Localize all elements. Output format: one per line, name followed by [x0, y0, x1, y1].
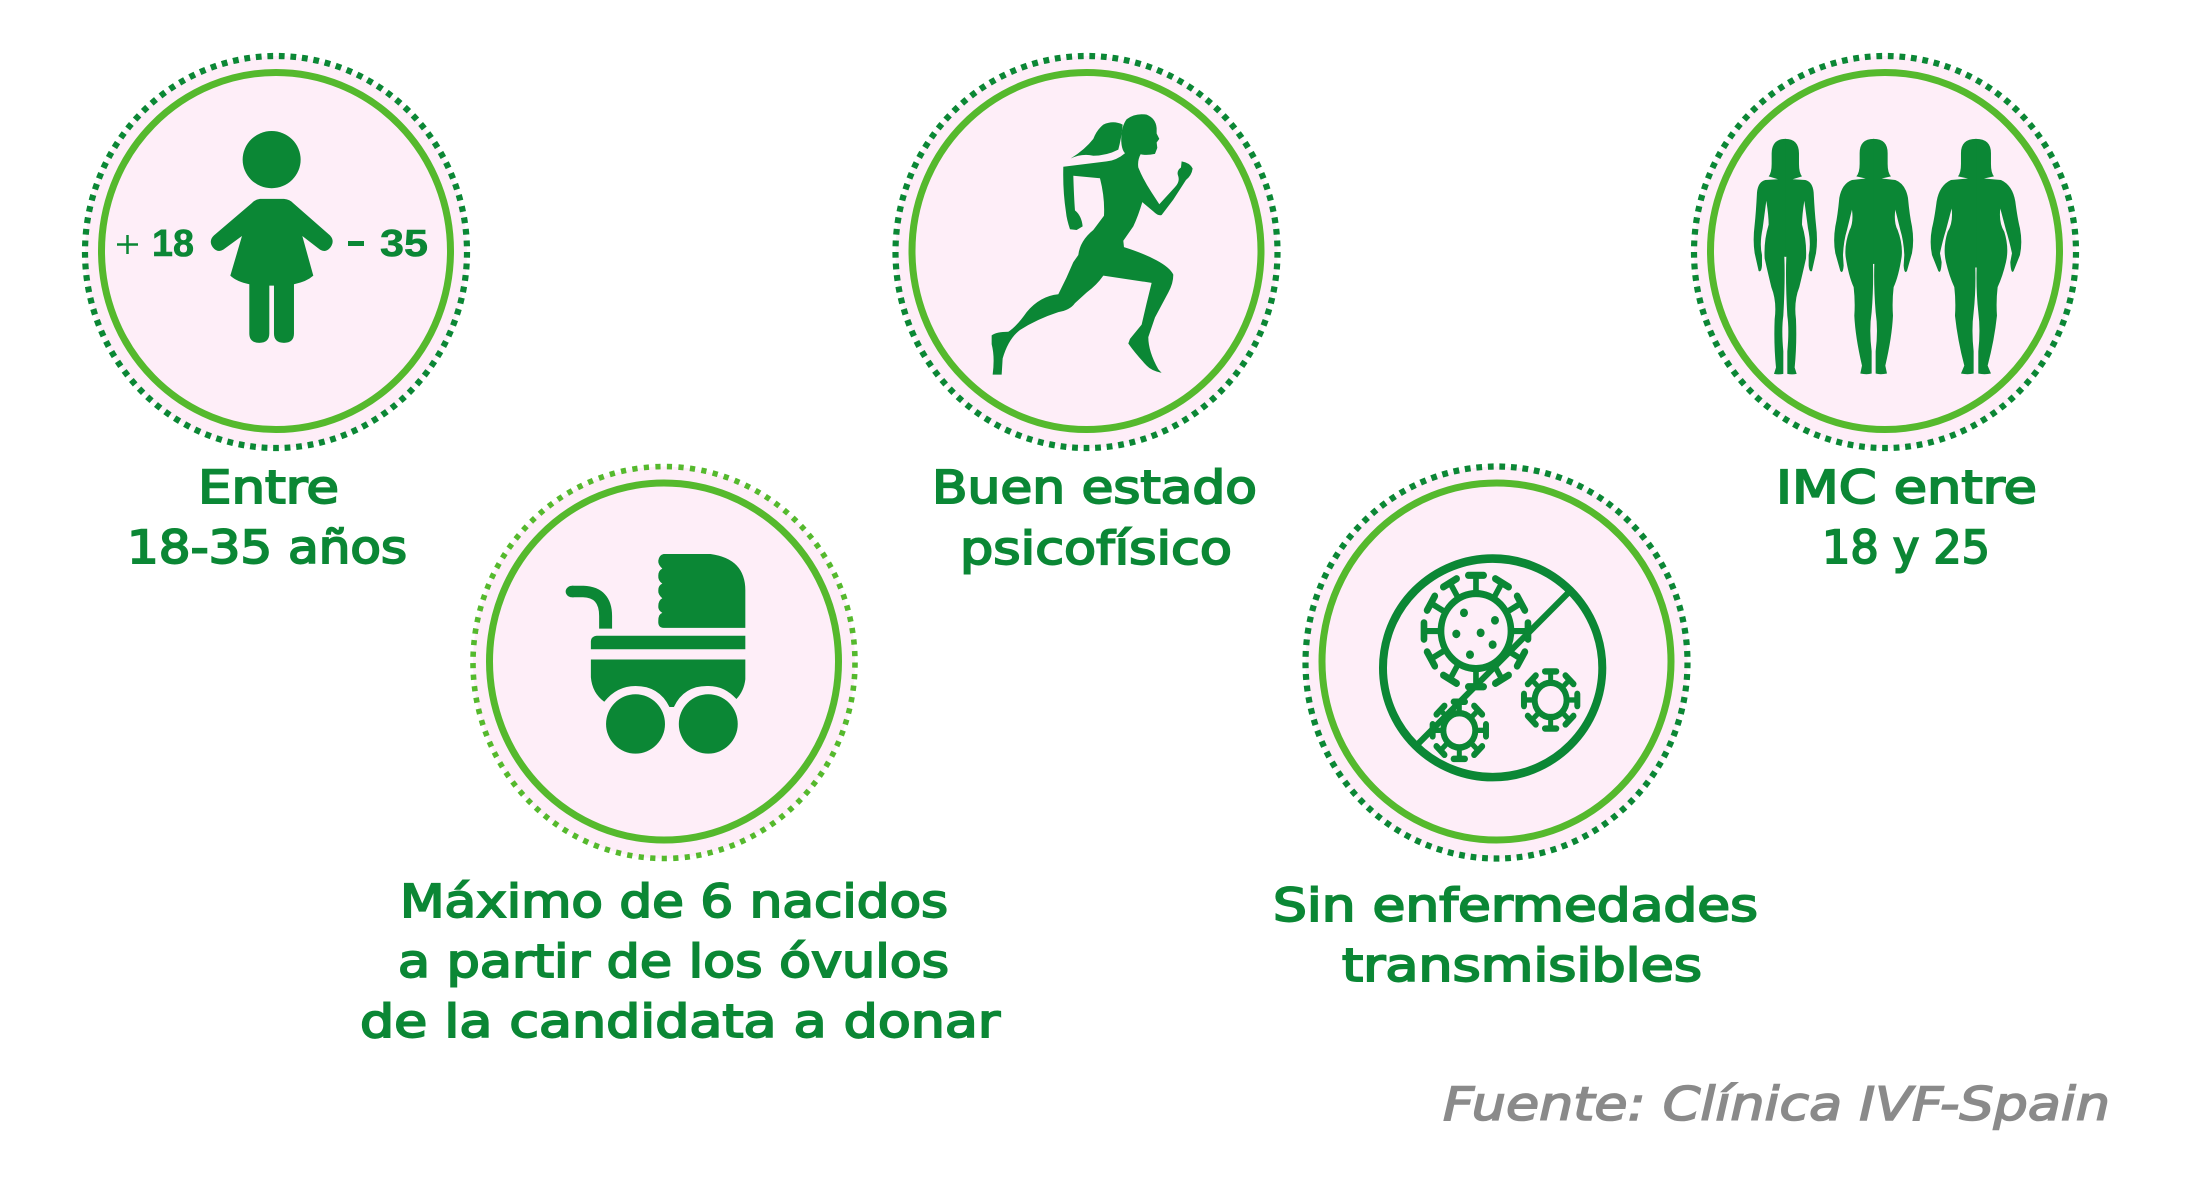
source credit: Fuente: Clínica IVF-Spain [1443, 1077, 2110, 1131]
text: Entre 18-35 años: 18-35 años [127, 521, 407, 574]
panel: enfermedades [1273, 466, 1758, 992]
icon: baby stroller [566, 554, 745, 754]
icon: three body silhouettes [1754, 139, 2021, 374]
label: + 18: 18 [152, 223, 194, 265]
text: Sin enfermedades transmisibles [1273, 879, 1758, 992]
label: + 18 [117, 223, 194, 265]
panel: nacidos [360, 466, 1001, 1048]
badge: nacidos [473, 466, 855, 858]
label: - 35: 35 [380, 223, 428, 265]
badge: edad [85, 56, 467, 448]
text: Buen estado psicofisico [932, 461, 1257, 575]
panel: psicofisico [896, 56, 1278, 575]
icon: runner [992, 114, 1193, 375]
badge: enfermedades [1306, 466, 1688, 858]
text: Maximo de 6 nacidos [360, 875, 1001, 1048]
text: Entre 18-35 años [127, 461, 407, 574]
icon: child silhouette [211, 131, 333, 343]
text: Entre 18-35 años: Entre [198, 461, 339, 514]
text: Maximo de 6 nacidos: de la candidata a donar [360, 995, 1001, 1048]
label: - 35 [348, 223, 428, 265]
panel: edad [85, 56, 467, 574]
text: IMC entre 18 y 25 [1776, 461, 2037, 574]
icon: crossed-out virus [1383, 559, 1602, 777]
badge: psicofisico [896, 56, 1278, 448]
badge: IMC [1694, 56, 2076, 448]
text: Maximo de 6 nacidos: Máximo de 6 nacidos [400, 875, 948, 928]
text: Buen estado psicofisico: Buen estado [932, 461, 1257, 514]
text: IMC entre 18 y 25: 18 y 25 [1822, 521, 1990, 574]
panel: IMC [1694, 56, 2076, 574]
text: Maximo de 6 nacidos: a partir de los óvulos [398, 935, 949, 988]
text: Sin enfermedades transmisibles: transmisibles [1342, 939, 1702, 992]
text: Buen estado psicofisico: psicofísico [960, 522, 1232, 575]
text: Sin enfermedades transmisibles: Sin enfermedades [1273, 879, 1758, 932]
text: IMC entre 18 y 25: IMC entre [1776, 461, 2037, 514]
